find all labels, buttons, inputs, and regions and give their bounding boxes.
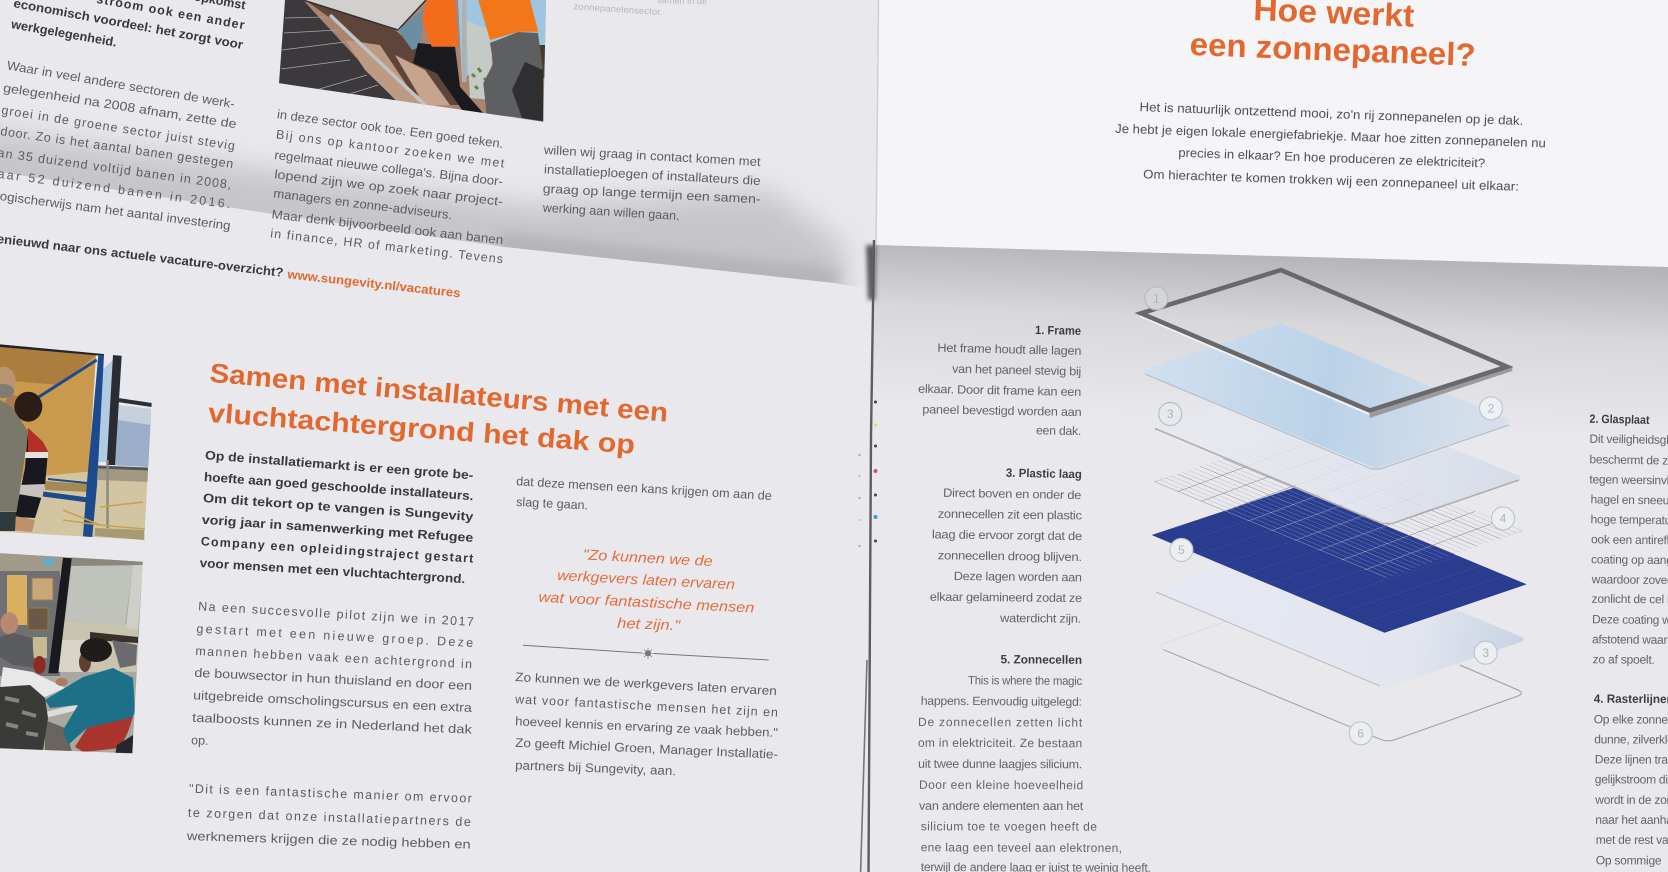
label text: 5. zonnecellen: happens. Eenvoudig uitgelegd: <box>921 694 1082 709</box>
number 3 top: 3 <box>1167 407 1174 421</box>
number 3 top <box>1159 402 1182 426</box>
pull quote <box>538 547 755 634</box>
label text: 3. plastic laag: Direct boven en onder de <box>943 486 1082 502</box>
number 2: 2 <box>1488 402 1495 416</box>
exploded solar panel diagram <box>1140 270 1527 745</box>
number 2 <box>1480 397 1502 420</box>
text block: column 1 body <box>0 58 238 233</box>
label text: 4. rasterlijnen: Op sommige <box>1596 853 1662 868</box>
number 5: 5 <box>1178 543 1185 557</box>
text block: right column top: dat deze mensen een kans krijgen om aan de <box>516 474 772 503</box>
label text: 5. zonnecellen: om in elektriciteit. Ze bestaan <box>918 736 1082 750</box>
label text: 3. plastic laag: zonnecellen zit een plastic <box>938 507 1082 522</box>
layer 4: grid lines <box>1154 436 1523 578</box>
text block: quote start: "Dit is een fantastische manier om ervoor <box>189 782 472 806</box>
heading: hoe werkt een zonnepaneel <box>1189 0 1476 73</box>
text block: quote start: werknemers krijgen die ze nodig hebben en <box>185 829 471 852</box>
layer 1: frame <box>1140 270 1512 418</box>
label text: 3. plastic laag: Deze lagen worden aan <box>954 569 1082 584</box>
label text: 5. zonnecellen: ene laag een teveel aan elektronen, <box>921 840 1122 855</box>
photo: classroom <box>0 553 145 758</box>
label text: 5. zonnecellen <box>918 652 1151 872</box>
text block: introduction: Om hierachter te komen trokken wij een zonnepaneel uit elkaar: <box>1143 167 1519 194</box>
layer 5: solar cells <box>1152 488 1527 633</box>
text block: pilot: uitgebreide omscholingscursus en een extra <box>193 688 472 715</box>
label text: 1. frame <box>918 323 1081 438</box>
text block: column 3: installatieploegen of installateurs die <box>544 162 761 188</box>
label text: 3. plastic laag <box>930 466 1083 626</box>
text block: column 2: managers en zonne-adviseurs. <box>273 186 453 222</box>
label text: 4. rasterlijnen <box>1594 692 1668 868</box>
text block: pilot: Na een succesvolle pilot zijn we in 2017 <box>198 599 474 629</box>
text block: intro bold <box>199 448 475 586</box>
text block: introduction: Het is natuurlijk ontzettend mooi, zo'n rij zonnepanelen op je dak. <box>1139 100 1524 128</box>
background: lower right page <box>862 245 1668 872</box>
photo caption <box>573 0 707 17</box>
background: top right page <box>876 0 1668 267</box>
text block: column 1 body: groei in de groene sector juist stevig <box>1 103 236 153</box>
text block: column 2: lopend zijn we op zoek naar project- <box>274 167 504 209</box>
text block: intro bold: Op de installatiemarkt is er een grote be- <box>205 448 474 482</box>
label text: 5. zonnecellen: 5. Zonnecellen <box>1000 652 1082 667</box>
label text: 5. zonnecellen: De zonnecellen zetten licht <box>918 715 1083 730</box>
label text: 1. frame: paneel bevestigd worden aan <box>922 402 1081 419</box>
layer 3: lower plastic <box>1156 544 1521 686</box>
label text: 3. plastic laag: 3. Plastic laag <box>1006 466 1082 481</box>
text block: quote start: te zorgen dat onze installatiepartners de <box>188 806 471 829</box>
pull quote: "Zo kunnen we de <box>582 547 713 570</box>
divider with sun icon <box>523 645 769 660</box>
number 6: 6 <box>1357 726 1364 740</box>
label text: 3. plastic laag: laag die ervoor zorgt dat de <box>932 527 1083 543</box>
label text: 1. frame: Het frame houdt alle lagen <box>937 341 1081 358</box>
text block: right column top: slag te gaan. <box>516 495 588 512</box>
text block: introduction: Je hebt je eigen lokale energiefabriekje. Maar hoe zitten zonnepanelen nu <box>1115 122 1546 150</box>
text block: pilot: taalboosts kunnen ze in Nederland het dak <box>192 711 473 737</box>
pull quote: wat voor fantastische mensen <box>538 590 755 617</box>
text block: column 2: Bij ons op kantoor zoeken we met <box>275 127 506 171</box>
text block: column 2: regelmaat nieuwe collega's. Bijna door- <box>274 148 504 189</box>
number 5 <box>1170 538 1193 562</box>
text block: column 2 <box>270 107 506 266</box>
text block: quote start <box>185 782 472 852</box>
text block: right column bottom: partners bij Sungevity, aan. <box>515 758 676 778</box>
text block: intro bold: hoefte aan goed geschoolde installateurs. <box>204 470 474 503</box>
background: left page <box>0 0 879 872</box>
pull quote: werkgevers laten ervaren <box>557 568 735 593</box>
text block: intro bold: voor mensen met een vluchtachtergrond. <box>199 556 466 586</box>
label text: 3. plastic laag: zonnecellen droog blijven. <box>938 548 1082 564</box>
label text: 5. zonnecellen: uit twee dunne laagjes silicium. <box>918 757 1082 771</box>
label text: 5. zonnecellen: This is where the magic <box>968 673 1082 688</box>
photo: workshop <box>0 340 155 545</box>
text block: column 3 <box>541 143 762 223</box>
text block: column 1 body: door. Zo is het aantal banen gestegen <box>0 124 234 171</box>
photo: installers on roof <box>270 0 550 125</box>
layer 3: upper plastic <box>1155 385 1519 524</box>
gutter crease shadows <box>861 0 878 872</box>
text block: right column bottom <box>514 670 778 778</box>
text block: right column bottom: wat voor fantastische mensen het zijn en <box>514 692 778 720</box>
number 1: 1 <box>1153 292 1160 306</box>
text block: intro bold: Company een opleidingstraject gestart <box>200 534 475 566</box>
text block: column 2: Maar denk bijvoorbeeld ook aan banen <box>271 207 504 247</box>
text block: right column bottom: hoeveel kennis en ervaring ze vaak hebben." <box>515 714 778 740</box>
label text: 5. zonnecellen: Door een kleine hoeveelheid <box>919 778 1083 792</box>
text block: column 3: werking aan willen gaan. <box>541 201 680 223</box>
label text: 3. plastic laag: elkaar gelamineerd zodat ze <box>930 590 1082 605</box>
label text: 2. glasplaat: zo af spoelt. <box>1593 652 1655 667</box>
text block: introduction: precies in elkaar? En hoe produceren ze elektriciteit? <box>1178 146 1485 170</box>
text block: pilot: de bouwsector in hun thuisland en door een <box>194 666 472 693</box>
layer 6: back sheet <box>1160 599 1522 741</box>
text block: intro column 1 bold: werkgelegenheid. <box>9 17 118 50</box>
number 4: 4 <box>1500 512 1507 526</box>
number 3 bottom <box>1474 641 1497 664</box>
text block: pilot <box>191 599 474 748</box>
left page fold shadow <box>0 121 854 286</box>
text block: right column bottom: Zo geeft Michiel Groen, Manager Installatie- <box>515 736 778 762</box>
label text: 1. frame: 1. Frame <box>1035 323 1081 338</box>
heading: hoe werkt een zonnepaneel: een zonnepaneel? <box>1189 26 1476 73</box>
number 4 <box>1492 507 1514 530</box>
text block: column 1 body: gelegenheid na 2008 afnam, zette de <box>2 81 238 131</box>
text block: column 3: graag op lange termijn een samen- <box>542 182 761 206</box>
label text: 1. frame: een dak. <box>1036 423 1081 438</box>
text block: right column bottom: Zo kunnen we de werkgevers laten ervaren <box>515 670 777 698</box>
photo caption: zonnepanelensector. <box>573 1 663 17</box>
text block: pilot: gestart met een nieuwe groep. Deze <box>196 622 474 650</box>
number 6 <box>1349 722 1372 745</box>
text block: pilot: mannen hebben vaak een achtergrond in <box>195 644 472 671</box>
label text: 2. glasplaat <box>1589 412 1668 667</box>
number 1 <box>1145 287 1168 310</box>
label text: 5. zonnecellen: van andere elementen aan het <box>919 799 1084 813</box>
text block: column 3: willen wij graag in contact komen met <box>542 143 762 169</box>
print registration dots <box>858 400 878 547</box>
layer 4: grid over cells <box>1224 488 1450 578</box>
label text: 5. zonnecellen: silicium toe te voegen heeft de <box>921 819 1097 834</box>
text block: pilot: op. <box>191 733 209 748</box>
label text: 1. frame: van het paneel stevig bij <box>952 362 1081 378</box>
text block: intro bold: vorig jaar in samenwerking met Refugee <box>201 513 474 545</box>
number 3 bottom: 3 <box>1482 646 1489 660</box>
text block: column 1 body: Waar in veel andere sectoren de werk- <box>6 58 236 111</box>
heading: samen met installateurs: Samen met installateurs met een <box>208 358 669 428</box>
heading: samen met installateurs: vluchtachtergrond het dak op <box>207 398 636 460</box>
text block: column 2: in deze sector ook toe. Een goed teken. <box>276 107 504 151</box>
heading: samen met installateurs <box>207 358 669 460</box>
label text: 3. plastic laag: waterdicht zijn. <box>999 611 1081 626</box>
label text: 2. glasplaat: 2. Glasplaat <box>1589 412 1650 427</box>
layer 2: glass plate <box>1145 326 1509 469</box>
call to action: www.sungevity.nl/vacatures <box>286 267 461 300</box>
text block: intro bold: Om dit tekort op te vangen is Sungevity <box>202 491 474 524</box>
text block: column 2: in finance, HR of marketing. Tevens <box>270 226 504 266</box>
pull quote: het zijn." <box>617 616 681 634</box>
label text: 1. frame: elkaar. Door dit frame kan een <box>918 382 1081 399</box>
call to action <box>0 231 461 300</box>
text block: introduction <box>1115 100 1546 194</box>
